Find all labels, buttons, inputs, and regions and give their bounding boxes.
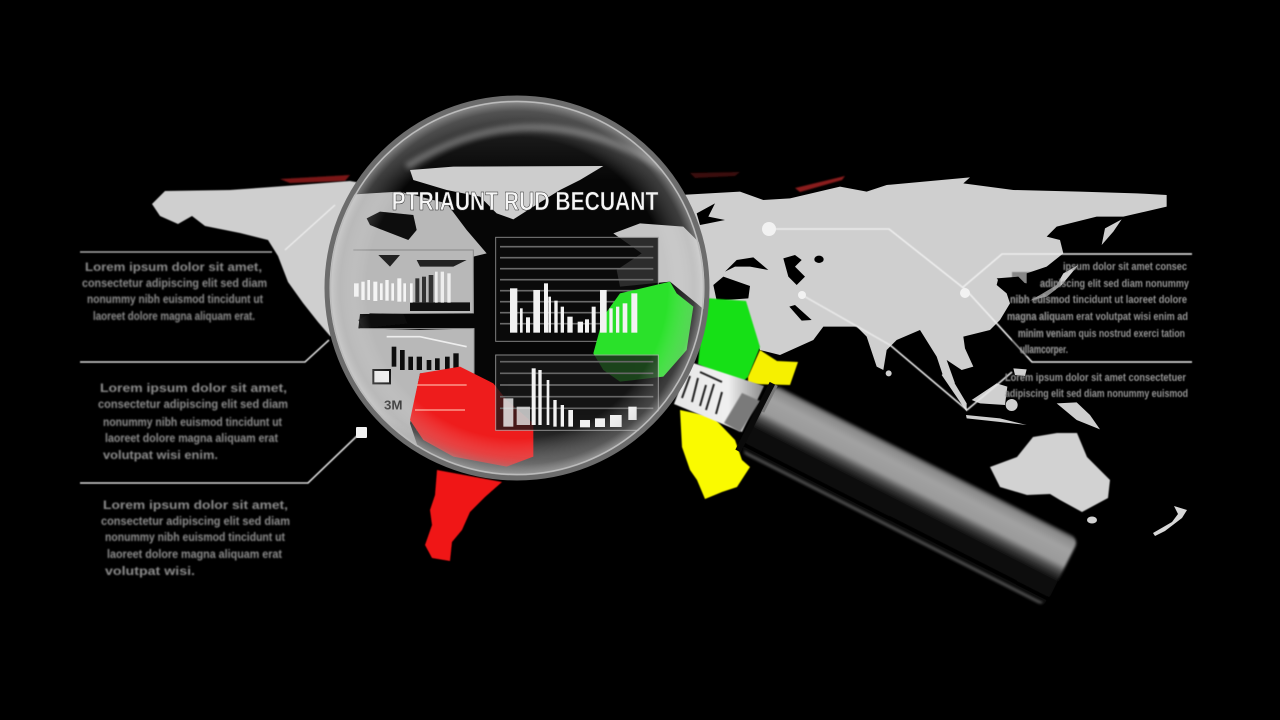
text block left 2: nonummy nibh euismod tincidunt ut: [103, 417, 282, 429]
text block right: ipsum dolor sit amet consec: [1063, 261, 1187, 273]
lens: bar chart: [510, 283, 637, 333]
map: Sumatra and Malay coast: [942, 370, 967, 412]
lens: top highlight arc: [407, 127, 667, 170]
map: Kamchatka: [1102, 219, 1122, 245]
right connector branch: [962, 254, 1192, 288]
map: Persian Gulf: [789, 305, 812, 321]
map: red streaks in the far north: [280, 172, 845, 192]
map: New Zealand: [1153, 506, 1187, 536]
text block right: adipiscing elit sed diam nonummy: [1040, 278, 1190, 290]
text block left 3: consectetur adipiscing elit sed diam: [101, 516, 290, 528]
text block left 1: consectetur adipiscing elit sed diam: [82, 278, 267, 290]
square marker: [356, 427, 367, 438]
dot: east Asia: [960, 288, 970, 298]
text block left 1: nonummy nibh euismod tincidunt ut: [87, 294, 263, 306]
map: Arabia in green: [698, 298, 760, 384]
left connector 2: [80, 340, 329, 362]
text block right: nibh euismod tincidunt ut laoreet dolore: [1010, 294, 1187, 306]
map: Caspian Sea: [783, 255, 805, 285]
map: Philippines: [1013, 368, 1027, 376]
map: Tasmania: [1087, 516, 1097, 524]
text block left 2: volutpat wisi enim.: [103, 450, 218, 462]
lens: dark bay: [358, 313, 402, 322]
text block left 3: Lorem ipsum dolor sit amet,: [103, 500, 288, 512]
lens: enlarged lake: [367, 212, 417, 240]
map: South America: [425, 470, 502, 561]
map: Baltic: [697, 203, 725, 225]
map: Aral Sea: [814, 256, 824, 263]
map: Sri Lanka: [886, 370, 892, 376]
lens rim: [327, 98, 707, 478]
lens: top-left panel: [353, 250, 473, 313]
map: Borneo: [972, 383, 1007, 405]
map: Mediterranean: [713, 277, 750, 301]
world map: [152, 172, 1187, 561]
text block left 3: nonummy nibh euismod tincidunt ut: [105, 532, 285, 544]
text block right: ullamcorper.: [1020, 344, 1068, 356]
lens: enlarged landmass left: [320, 192, 487, 453]
text block left 1: Lorem ipsum dolor sit amet,: [85, 262, 262, 274]
lens: green region: [593, 282, 693, 382]
magnifying glass: [320, 95, 1079, 607]
lens: title: PTRIAUNT RUD BECUANT: [392, 186, 658, 216]
infographic canvas: [79, 96, 1193, 605]
text block right: minim veniam quis nostrud exerci tation: [1018, 328, 1185, 340]
south Asia connector: [802, 295, 1012, 410]
lens: right panel: [496, 237, 693, 382]
text block right: adipiscing elit sed diam nonummy euismod: [1005, 388, 1188, 400]
dot: west Asia: [762, 222, 776, 236]
text block left 2: [98, 383, 288, 462]
ferrule: [674, 362, 764, 432]
text block left 2: consectetur adipiscing elit sed diam: [98, 399, 288, 411]
lens: bottom-left panel: [360, 329, 474, 430]
map: New Guinea: [1057, 402, 1100, 429]
text block right: Lorem ipsum dolor sit amet consectetuer: [1005, 372, 1187, 384]
map connector north America: [285, 205, 335, 250]
map: South China Sea inlet: [971, 336, 977, 342]
lens: red region: [410, 367, 533, 467]
right connector upper: [768, 229, 1192, 362]
text block left 1: [82, 262, 267, 323]
map: Java: [966, 415, 1027, 425]
map: Australia: [990, 433, 1110, 512]
map: Eurasia: [680, 177, 1167, 429]
dot: Caspian: [798, 291, 806, 299]
handle: [735, 382, 1079, 607]
left rule 1: [80, 251, 272, 253]
lens: edge sheen: [329, 100, 705, 476]
lens: enlarged landmass right: [613, 223, 704, 309]
text block left 2: Lorem ipsum dolor sit amet,: [100, 383, 287, 395]
text block left 3: laoreet dolore magna aliquam erat: [107, 549, 282, 561]
left connector 3: [80, 435, 358, 483]
map: Sulawesi: [1006, 399, 1018, 411]
map: southern Africa in yellow: [680, 410, 750, 499]
map: North America: [152, 181, 400, 350]
lens glass: [320, 95, 720, 485]
text block left 2: laoreet dolore magna aliquam erat: [105, 433, 278, 445]
text block right: [1005, 261, 1190, 400]
map: Horn of Africa in yellow: [748, 350, 798, 385]
connector lines: [80, 205, 1192, 483]
map: Black Sea: [725, 257, 768, 272]
connector dots: [356, 222, 970, 438]
text block left 3: volutpat wisi.: [105, 566, 195, 578]
map: Korea inlet: [997, 277, 1027, 292]
text block right: magna aliquam erat volutpat wisi enim ad: [1007, 311, 1188, 323]
lens: bottom-left panel: 3M: [384, 397, 403, 412]
map: Japan: [1030, 265, 1078, 301]
lens: bottom-right panel: [496, 355, 658, 430]
text block left 3: [101, 500, 290, 578]
text block left 1: laoreet dolore magna aliquam erat.: [93, 311, 255, 323]
lens: enlarged landmass top: [410, 166, 603, 219]
